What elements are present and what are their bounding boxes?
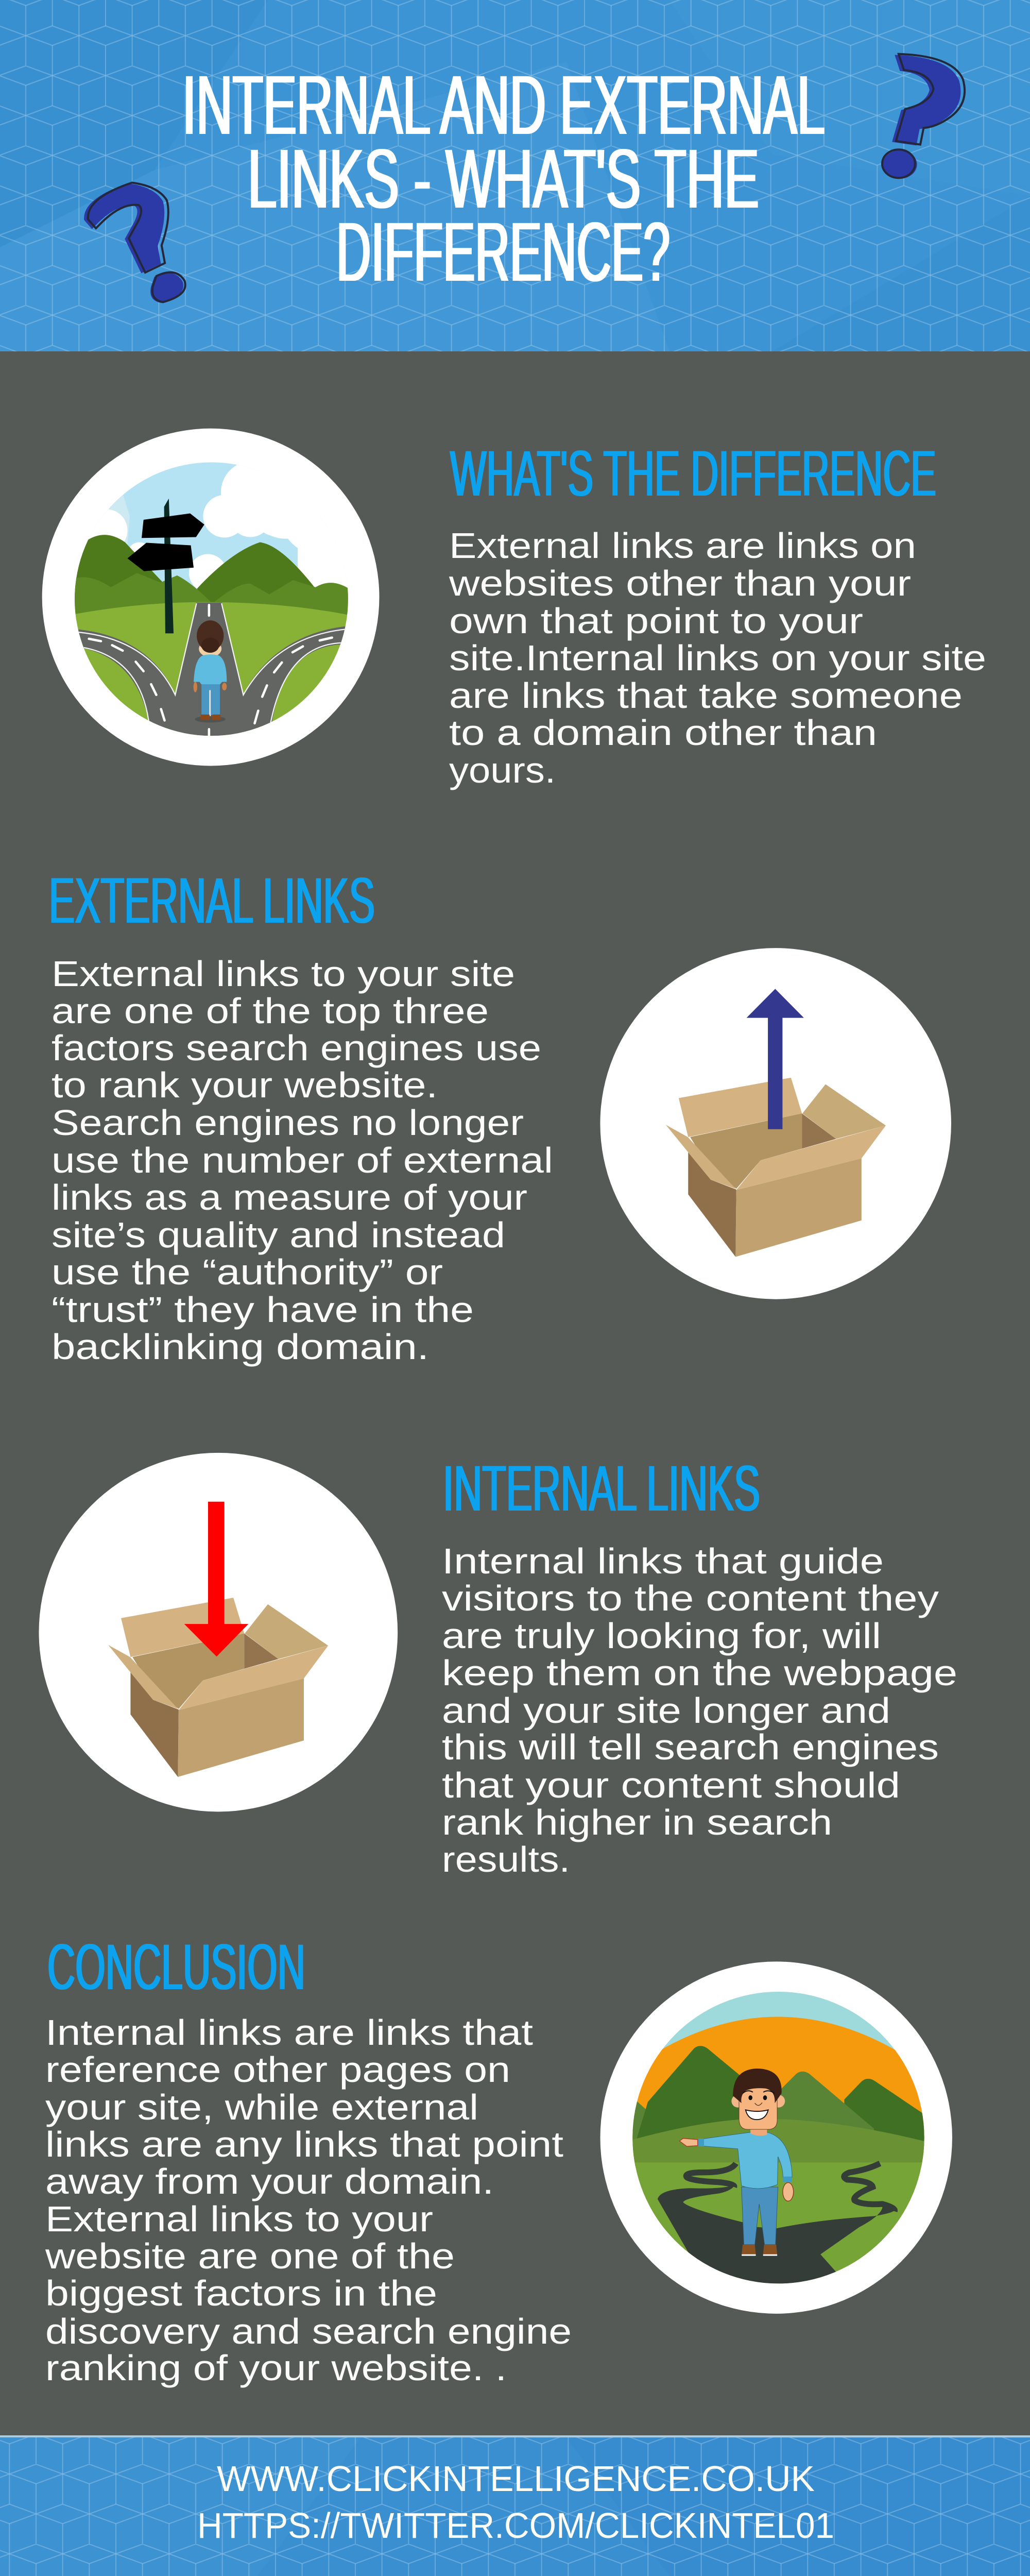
text block: what's the difference: are links that take someone bbox=[449, 675, 963, 716]
heading: external links: EXTERNAL LINKS bbox=[49, 865, 375, 937]
text block: internal links: visitors to the content they bbox=[442, 1578, 939, 1618]
text block: internal links: are truly looking for, will bbox=[442, 1616, 881, 1656]
icon: question mark bottom left bbox=[84, 183, 185, 303]
text block: conclusion: biggest factors in the bbox=[45, 2273, 437, 2313]
text block: conclusion: External links to your bbox=[45, 2199, 433, 2239]
text block: what's the difference: own that point to your bbox=[449, 601, 863, 641]
man seen from behind bbox=[194, 620, 227, 722]
illustration: smiling man pointing on a winding road bbox=[600, 1961, 952, 2314]
hands bbox=[679, 2139, 698, 2146]
title: DIFFERENCE? bbox=[336, 205, 670, 299]
header banner bbox=[0, 0, 1030, 351]
illustration: box with red arrow going in bbox=[39, 1453, 398, 1811]
illustration: man at a fork in the road bbox=[42, 429, 380, 766]
text block: internal links: and your site longer and bbox=[442, 1690, 890, 1731]
text block: external links: site’s quality and instead bbox=[52, 1215, 505, 1255]
text block: conclusion: Internal links are links that bbox=[45, 2012, 533, 2053]
text block: conclusion: links are any links that point bbox=[45, 2124, 563, 2164]
roads bbox=[78, 603, 346, 743]
text block: conclusion: your site, while external bbox=[45, 2087, 478, 2127]
clouds bbox=[89, 465, 348, 591]
text block: what's the difference: websites other than your bbox=[449, 563, 911, 603]
icon: question mark top right bbox=[882, 54, 965, 179]
footer banner bbox=[0, 2435, 1030, 2576]
man bbox=[679, 2069, 794, 2256]
meadow bbox=[631, 2162, 928, 2286]
illustration: box with blue arrow going out bbox=[600, 948, 951, 1299]
text block: internal links: this will tell search engines bbox=[442, 1727, 939, 1767]
footer website link: WWW.CLICKINTELLIGENCE.CO.UK bbox=[217, 2459, 815, 2499]
heading: internal links: INTERNAL LINKS bbox=[443, 1453, 760, 1524]
text block: external links: Search engines no longer bbox=[52, 1103, 524, 1143]
signpost bbox=[127, 499, 204, 633]
arrow: up bbox=[747, 989, 804, 1129]
text block: what's the difference: site.Internal links on your site bbox=[449, 638, 986, 678]
arrow: down bbox=[184, 1502, 248, 1656]
text block: internal links: rank higher in search bbox=[442, 1802, 832, 1842]
jeans bbox=[742, 2187, 778, 2245]
text block: external links: “trust” they have in the bbox=[52, 1290, 474, 1330]
text block: what's the difference: External links are links on bbox=[449, 526, 916, 566]
text block: conclusion: website are one of the bbox=[45, 2236, 455, 2276]
text block: what's the difference bbox=[449, 526, 986, 790]
text block: internal links bbox=[442, 1541, 957, 1879]
text block: external links: backlinking domain. bbox=[52, 1327, 429, 1367]
text block: external links: External links to your site bbox=[52, 954, 515, 994]
text block: conclusion: ranking of your website. . bbox=[45, 2348, 507, 2388]
head bbox=[750, 2129, 767, 2136]
mountains bbox=[632, 2101, 646, 2166]
heading: conclusion: CONCLUSION bbox=[47, 1931, 305, 2003]
text block: conclusion: discovery and search engine bbox=[45, 2311, 572, 2351]
text block: external links: links as a measure of your bbox=[52, 1177, 527, 1217]
text block: internal links: results. bbox=[442, 1839, 570, 1879]
text block: external links: use the number of external bbox=[52, 1140, 553, 1180]
meadow bbox=[73, 602, 350, 739]
text block: what's the difference: to a domain other than bbox=[449, 713, 877, 753]
winding road bbox=[658, 2163, 896, 2288]
text block: conclusion: away from your domain. bbox=[45, 2161, 494, 2201]
text block: external links: use the “authority” or bbox=[52, 1252, 443, 1292]
text block: internal links: Internal links that guide bbox=[442, 1541, 884, 1581]
text block: conclusion: reference other pages on bbox=[45, 2049, 510, 2090]
text block: conclusion bbox=[45, 2012, 572, 2388]
text block: external links: are one of the top three bbox=[52, 991, 489, 1031]
text block: what's the difference: yours. bbox=[449, 750, 556, 790]
text block: internal links: keep them on the webpage bbox=[442, 1653, 957, 1693]
footer twitter link: HTTPS://TWITTER.COM/CLICKINTEL01 bbox=[197, 2505, 834, 2546]
text block: external links bbox=[52, 954, 553, 1367]
shirt bbox=[698, 2132, 792, 2189]
title bbox=[182, 58, 825, 299]
text block: external links: factors search engines use bbox=[52, 1028, 541, 1068]
text block: internal links: that your content should bbox=[442, 1765, 900, 1805]
text block: external links: to rank your website. bbox=[52, 1065, 438, 1105]
hills bbox=[73, 535, 163, 616]
